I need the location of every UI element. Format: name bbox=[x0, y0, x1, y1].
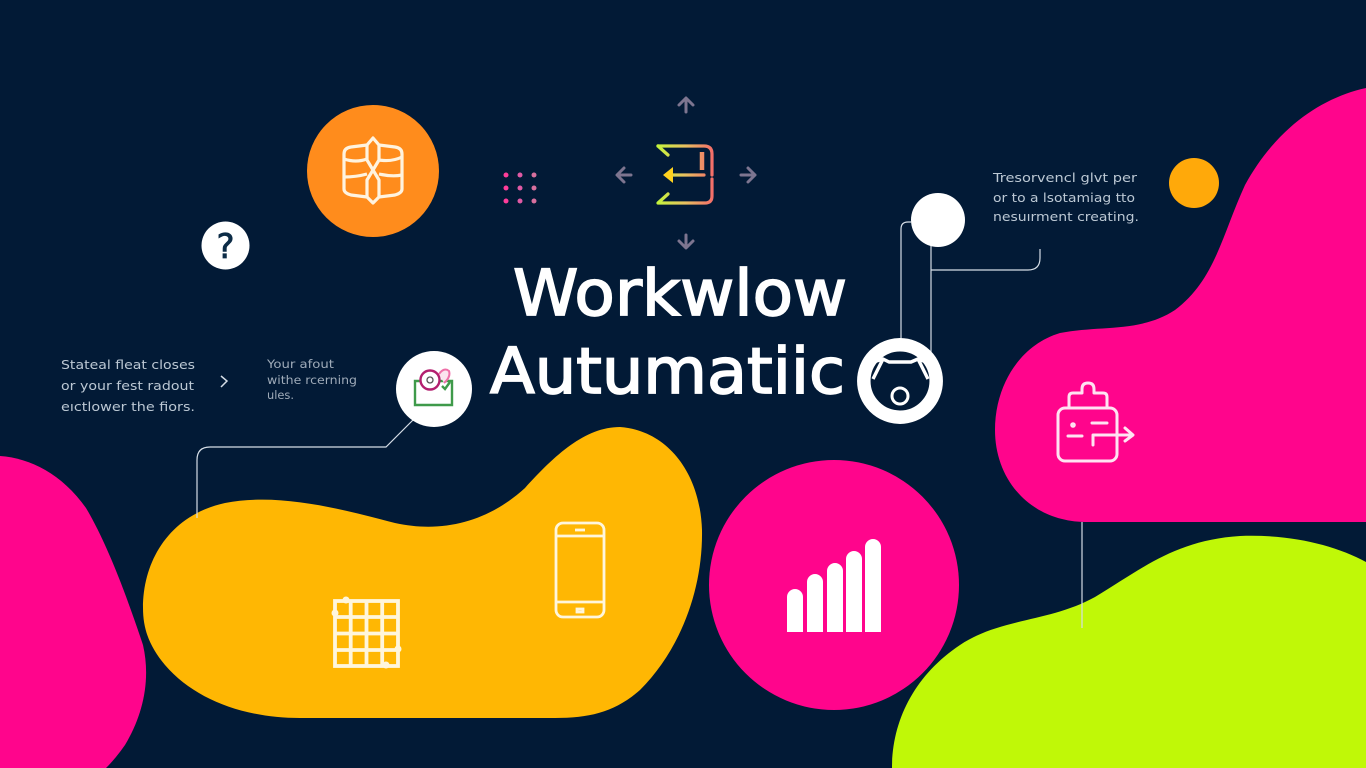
dot grid bbox=[504, 172, 536, 204]
callout text: left bbox=[61, 357, 195, 414]
blob: yellow panel bbox=[143, 427, 702, 718]
bar chart icon bbox=[787, 539, 881, 632]
icon: question mark badge: ? bbox=[216, 227, 235, 267]
callout text: left: or your fest radout bbox=[61, 378, 194, 393]
callout text: top right bbox=[992, 170, 1139, 224]
arrow: up bbox=[679, 98, 693, 112]
callout text: left: eıctlower the fiors. bbox=[61, 399, 195, 414]
icon: workflow arrows cluster bbox=[617, 98, 755, 248]
icon: grid table bbox=[332, 596, 402, 668]
icon: phone bbox=[556, 523, 604, 617]
blob: right pink panel bbox=[995, 88, 1366, 522]
icon: envelope badge bbox=[396, 351, 472, 427]
callout text: top right: nesuırment creating. bbox=[993, 209, 1139, 224]
arrow: right bbox=[741, 168, 755, 182]
title: Autumatiic bbox=[490, 335, 845, 408]
orange-yellow dot bbox=[1169, 158, 1219, 208]
blob: left pink bbox=[0, 456, 146, 768]
icon: orange circle with shield grid bbox=[307, 105, 439, 237]
arrow: down bbox=[679, 235, 693, 248]
callout text: top right: Tresorvencl glvt per bbox=[992, 170, 1138, 185]
icon: question mark badge bbox=[202, 222, 250, 270]
icon: face badge bbox=[864, 345, 936, 417]
callout text: middle: Your afout bbox=[266, 357, 335, 371]
title bbox=[490, 257, 847, 408]
blob: lime corner bbox=[892, 536, 1366, 768]
icon: bag with export arrow bbox=[1058, 383, 1133, 461]
callout text: left: Stateal fleat closes bbox=[61, 357, 195, 372]
title: Workwlow bbox=[513, 257, 847, 330]
callout text: middle: ules. bbox=[267, 388, 294, 402]
callout text: top right: or to a lsotamiag tto bbox=[993, 190, 1135, 205]
connector lines bbox=[197, 222, 1082, 628]
arrow: left bbox=[617, 168, 631, 182]
white node bbox=[911, 193, 965, 247]
icon: central return arrows bbox=[658, 146, 712, 203]
callout text: middle: withe rcerning bbox=[267, 373, 357, 387]
callout text: middle bbox=[266, 357, 357, 402]
chevron arrow bbox=[221, 376, 227, 387]
circle panel: pink chart bbox=[709, 460, 959, 710]
